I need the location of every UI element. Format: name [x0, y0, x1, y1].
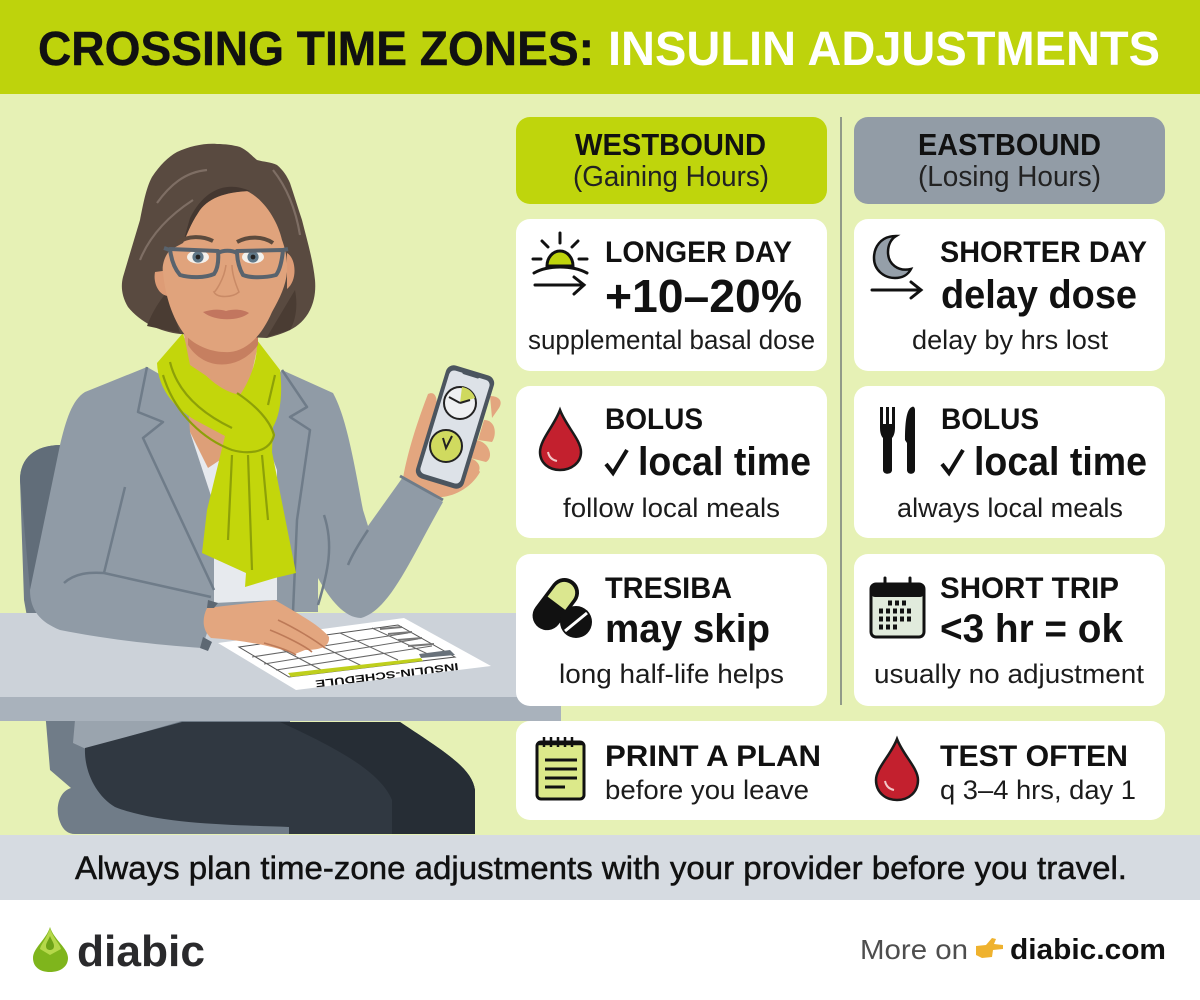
chair [20, 445, 290, 834]
westbound header [516, 117, 827, 204]
icon: blood drop [876, 739, 918, 800]
card: tresiba [516, 554, 827, 706]
card: tresiba: TRESIBA [605, 572, 732, 605]
glasses [164, 248, 288, 277]
card: bolus east: local time [974, 440, 1147, 484]
card: longer day [516, 219, 827, 371]
card: bolus east [854, 386, 1165, 538]
face [155, 187, 295, 352]
icon: blood drop [540, 410, 581, 470]
sheet: insulin schedule: INSULIN-SCHEDULE [314, 660, 459, 689]
eastbound header [854, 117, 1165, 204]
nose [214, 265, 239, 296]
green scarf [157, 333, 296, 587]
card: short trip: <3 hr = ok [940, 607, 1124, 651]
icon: calendar [871, 578, 924, 637]
card: bolus east: always local meals [897, 493, 1123, 523]
desk top [0, 613, 561, 697]
card: shorter day: SHORTER DAY [940, 236, 1147, 269]
eastbound header: EASTBOUND [918, 127, 1101, 162]
card: longer day: supplemental basal dose [528, 325, 815, 355]
illustration: woman at desk holding phone [0, 144, 561, 834]
link: more on diabic.com [860, 934, 1166, 966]
card: longer day: +10–20% [605, 270, 802, 322]
logo: diabic: diabic [77, 927, 205, 976]
icon: fork and knife [880, 407, 915, 474]
white blouse [190, 432, 277, 603]
westbound header: WESTBOUND [575, 127, 766, 162]
card: bolus west [516, 386, 827, 538]
panel: print a plan and test often: PRINT A PLAN [605, 740, 821, 773]
card: shorter day: delay by hrs lost [912, 325, 1108, 355]
jacket lapel and fold lines [64, 367, 368, 612]
westbound header: (Gaining Hours) [573, 161, 769, 193]
panel: print a plan and test often [516, 721, 1165, 820]
jacket [30, 367, 443, 648]
bottom reminder band: Always plan time-zone adjustments with your provider before you travel. [75, 850, 1127, 886]
icon: crescent moon with arrow [872, 236, 921, 298]
sheet: insulin schedule [218, 618, 491, 690]
phone with two clocks [414, 363, 496, 491]
icon: capsule and tablet [527, 572, 592, 638]
panel: print a plan and test often: before you leave [605, 775, 809, 805]
card: short trip: usually no adjustment [874, 659, 1145, 689]
card: short trip: SHORT TRIP [940, 572, 1119, 605]
link: more on diabic.com: diabic.com [1010, 934, 1166, 966]
panel: print a plan and test often: q 3–4 hrs, day 1 [940, 775, 1136, 805]
chest skin [183, 338, 258, 468]
jacket lower hem [73, 720, 182, 749]
column divider [840, 117, 842, 705]
neck [183, 330, 258, 393]
check mark [606, 450, 627, 473]
card: bolus west: follow local meals [563, 493, 780, 523]
trousers [85, 722, 475, 834]
hair [122, 144, 315, 338]
desk front edge [0, 697, 561, 721]
clock: arrival [430, 430, 462, 462]
link: more on diabic.com: More on [860, 934, 968, 965]
icon: sunrise with arrow [533, 233, 587, 294]
bottom reminder band [0, 835, 1200, 900]
check mark [942, 450, 963, 473]
eyebrows [177, 237, 273, 243]
card: tresiba: long half-life helps [559, 659, 784, 689]
title banner: INSULIN ADJUSTMENTS [608, 23, 1160, 76]
eyes [187, 250, 264, 264]
panel: print a plan and test often: TEST OFTEN [940, 740, 1128, 773]
card: short trip [854, 554, 1165, 706]
hand on desk [200, 600, 329, 655]
icon: notepad [537, 737, 584, 799]
card: shorter day: delay dose [941, 273, 1137, 317]
card: bolus west: BOLUS [605, 403, 703, 436]
card: bolus west: local time [638, 440, 811, 484]
clock: departure [444, 387, 476, 419]
card: shorter day [854, 219, 1165, 371]
footer [0, 900, 1200, 1000]
card: bolus east: BOLUS [941, 403, 1039, 436]
title banner [0, 0, 1200, 94]
title banner: CROSSING TIME ZONES: [38, 23, 594, 76]
card: tresiba: may skip [605, 607, 770, 651]
eastbound header: (Losing Hours) [918, 161, 1101, 193]
card: longer day: LONGER DAY [605, 236, 792, 269]
hand holding phone [400, 393, 501, 500]
mouth [203, 310, 249, 319]
icon: pointing hand [976, 938, 1003, 958]
